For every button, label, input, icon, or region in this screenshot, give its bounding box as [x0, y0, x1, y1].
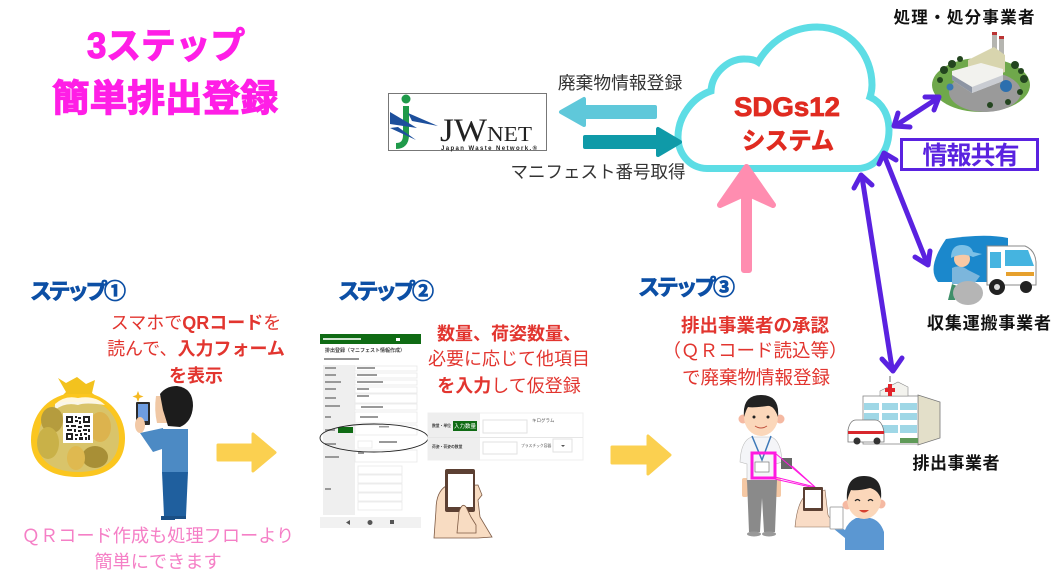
icon: generator staff with ID badge — [738, 395, 815, 536]
arrow: step 1 to step 2 — [218, 434, 275, 471]
icon: hospital and ambulance — [848, 376, 940, 445]
step 3 description: で廃棄物情報登録 — [682, 367, 830, 388]
screenshot: registration form: 排出登録（マニフェスト情報作成） — [325, 347, 405, 354]
step 3 description: 排出事業者の承認 — [681, 315, 829, 336]
panel: step 3 — [638, 275, 886, 550]
icon: worker reading the QR code with smartphone — [795, 476, 886, 550]
note: QR code creation — [22, 526, 294, 572]
cloud: SDGs12 system — [678, 27, 889, 168]
step 2 description: 数量、荷姿数量、 — [437, 324, 581, 344]
screenshot: enlarged quantity fields: 数量・単位 — [432, 423, 451, 428]
screenshot: enlarged quantity fields — [428, 413, 583, 460]
label: collection and transport operators: 収集運搬事業者 — [927, 314, 1051, 333]
label: manifest number acquisition: マニフェスト番号取得 — [510, 162, 686, 182]
cloud: SDGs12 system: システム — [742, 128, 834, 155]
badge: information sharing — [902, 140, 1038, 170]
cloud: SDGs12 system: SDGs12 — [734, 92, 840, 122]
JWNET logo — [388, 94, 546, 152]
title: 簡単排出登録 — [52, 78, 278, 119]
JWNET logo: NET — [487, 122, 532, 146]
step 2 description: を入力して仮登録 — [437, 376, 581, 396]
step 3 description — [662, 315, 848, 388]
icon: person scanning with smartphone — [132, 386, 193, 520]
step 1 description: 読んで、入力フォーム — [107, 339, 285, 359]
step 1 heading: ステップ① — [30, 279, 126, 304]
step 3 heading: ステップ③ — [638, 275, 735, 300]
JWNET logo: Japan Waste Network.® — [441, 145, 538, 152]
screenshot: enlarged quantity fields: プラスチック容器 — [521, 443, 552, 448]
arrow: step 3 up to system — [720, 167, 773, 270]
badge: information sharing: 情報共有 — [922, 142, 1020, 170]
title — [52, 25, 278, 119]
step 1 description — [107, 313, 285, 386]
screenshot: registration form — [320, 334, 428, 528]
icon: collection truck — [934, 236, 1036, 305]
label: treatment and disposal operators: 処理・処分事業者 — [894, 8, 1034, 27]
step 1 description: を表示 — [169, 366, 223, 386]
icon: treatment plant — [932, 32, 1030, 112]
title: 3ステップ — [87, 25, 245, 66]
JWNET logo: JW — [440, 113, 488, 149]
icon: hand holding smartphone — [434, 469, 492, 538]
note: QR code creation: 簡単にできます — [94, 552, 222, 572]
step 2 heading: ステップ② — [338, 279, 434, 304]
arrow: to system — [585, 129, 680, 155]
panel: step 1 — [22, 279, 294, 572]
step 2 description — [428, 324, 590, 396]
arrow: hospital to system — [854, 175, 902, 371]
screenshot: enlarged quantity fields: 荷姿・荷姿の数量 — [432, 444, 463, 449]
label: waste generator: 排出事業者 — [912, 454, 1000, 473]
arrow: truck to system — [879, 153, 930, 265]
step 3 description: （ＱＲコード読込等） — [662, 340, 848, 361]
arrow: plant to system — [894, 97, 939, 127]
note: QR code creation: ＱＲコード作成も処理フローより — [22, 526, 294, 546]
icon: waste bag with QR code — [31, 377, 125, 477]
panel: step 2 — [320, 279, 670, 538]
label: waste information registration: 廃棄物情報登録 — [558, 73, 682, 93]
step 2 description: 必要に応じて他項目 — [428, 349, 590, 369]
arrow: to JWNET — [561, 99, 655, 125]
screenshot: enlarged quantity fields: キログラム — [532, 417, 555, 424]
arrow: step 2 to step 3 — [612, 436, 670, 474]
step 1 description: スマホでQRコードを — [111, 313, 281, 333]
screenshot: enlarged quantity fields: 入力数量 — [454, 422, 476, 430]
